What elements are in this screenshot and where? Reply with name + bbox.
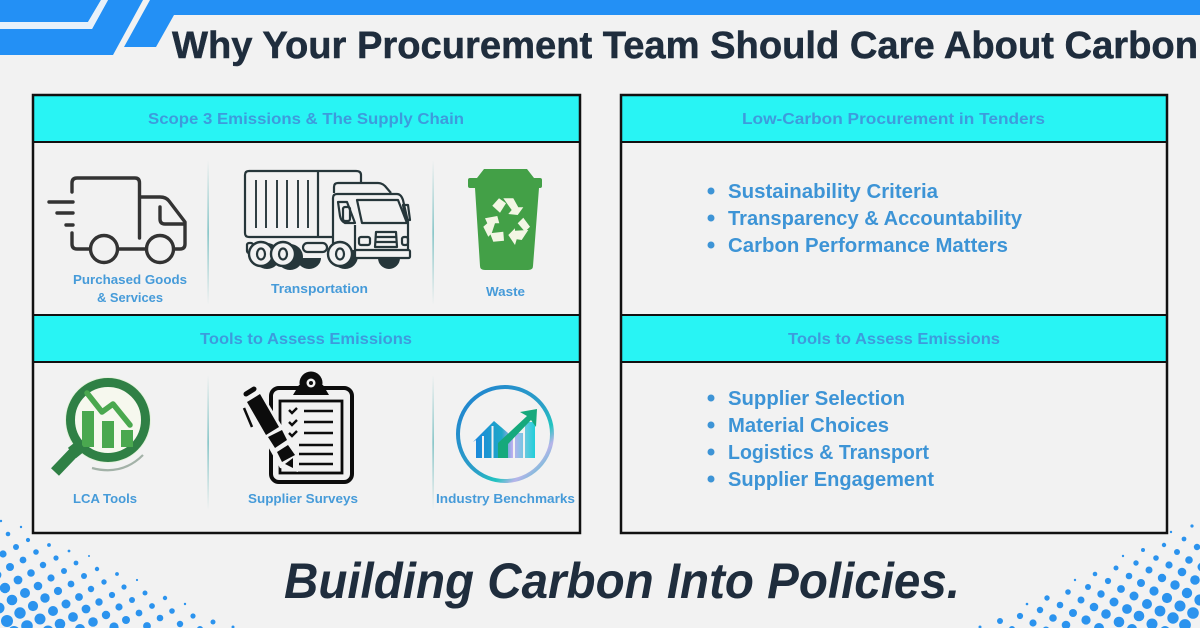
label: Purchased Goods & Services <box>73 272 187 305</box>
section header: Low-Carbon Procurement: Low-Carbon Procurement in Tenders <box>742 111 1045 128</box>
bullet list: assessment: Supplier Engagement <box>728 469 934 491</box>
icon: benchmark growth chart <box>458 387 552 481</box>
bullet list: tenders: Sustainability Criteria <box>728 181 939 203</box>
label: Industry Benchmarks: Industry Benchmarks <box>436 491 575 506</box>
title: Why Your Procurement Team Should Care About Carbon <box>172 25 1198 67</box>
section header: Scope 3 Emissions: Scope 3 Emissions & The Supply Chain <box>148 111 464 128</box>
closing headline: Building Carbon Into Policies. <box>284 553 960 609</box>
section header: Scope 3 Emissions <box>33 95 580 142</box>
icon: recycling bin <box>468 169 542 270</box>
label: Purchased Goods & Services: & Services <box>97 290 163 305</box>
icon: LCA magnifier with declining chart <box>55 377 151 472</box>
label: Waste: Waste <box>486 284 525 299</box>
bullet list: assessment: Supplier Selection <box>728 388 905 410</box>
bullet list: tenders: Carbon Performance Matters <box>728 235 1008 257</box>
label: LCA Tools: LCA Tools <box>73 491 137 506</box>
panel: right column <box>621 95 1167 533</box>
bullet list: tenders: Transparency & Accountability <box>728 208 1023 230</box>
icon: delivery truck <box>49 178 185 262</box>
halftone dots: bottom right <box>978 524 1200 628</box>
bullet list: tenders <box>708 181 1023 257</box>
section header: Tools to Assess Emissions, right: Tools to Assess Emissions <box>788 331 1000 348</box>
bullet list: assessment: Logistics & Transport <box>728 442 929 464</box>
header ribbon graphic <box>0 0 1200 55</box>
section header: Low-Carbon Procurement <box>621 95 1167 142</box>
section header: Tools to Assess Emissions <box>33 315 580 362</box>
section header: Tools to Assess Emissions, right <box>621 315 1167 362</box>
bullet list: assessment <box>708 388 934 491</box>
icon: container truck <box>245 171 410 270</box>
label: Supplier Surveys: Supplier Surveys <box>248 491 358 506</box>
wheels and undercarriage <box>247 242 400 270</box>
label: Purchased Goods & Services: Purchased Goods <box>73 272 187 287</box>
halftone dots: bottom left <box>0 520 234 628</box>
section header: Tools to Assess Emissions: Tools to Assess Emissions <box>200 331 412 348</box>
panel: left column <box>33 95 580 533</box>
bullet list: assessment: Material Choices <box>728 415 889 437</box>
icon: clipboard with pen <box>243 372 352 482</box>
label: Transportation: Transportation <box>271 281 368 296</box>
